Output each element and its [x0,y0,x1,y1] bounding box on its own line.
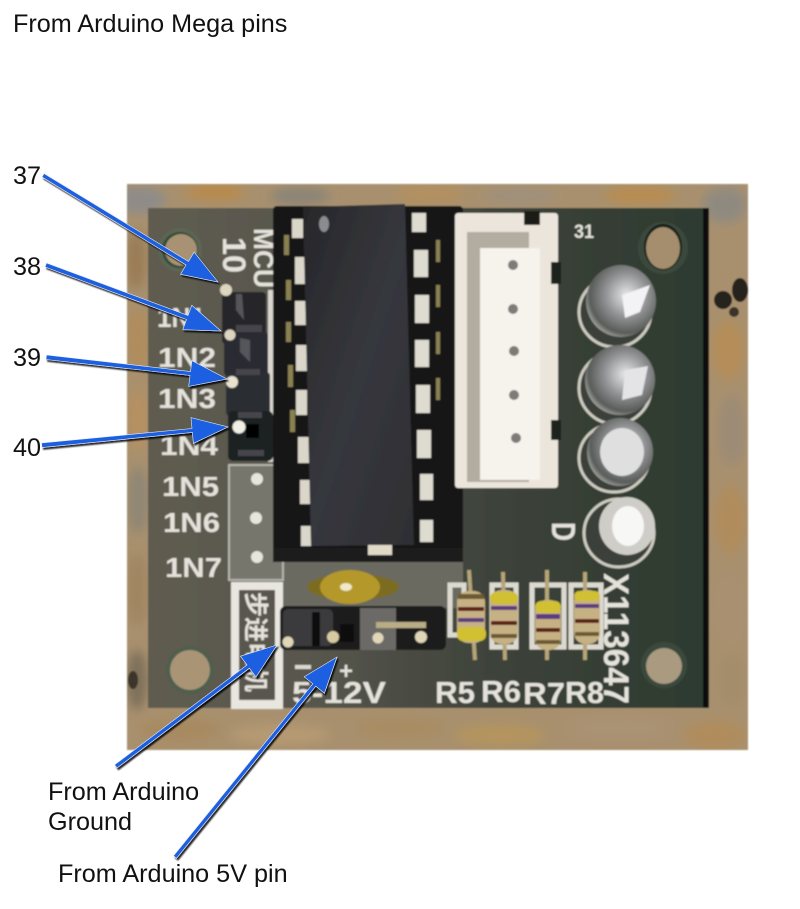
R8 [574,590,600,644]
photo background: stone surface [114,184,748,750]
arrow: pin 40 [42,418,228,448]
stepper motor silkscreen box: 步进电机 [241,592,269,692]
power labels: + [339,658,353,685]
yellow capacitor [307,570,399,604]
LED 4 [584,497,655,567]
silkscreen input labels: 1N1 [157,302,205,333]
pin label 39: 39 [13,344,41,372]
header pins [220,284,246,434]
photo: stepper driver board [114,184,748,750]
power labels [292,658,386,710]
circuit board [148,208,709,708]
arrow: pin 39 [46,355,227,386]
socket pins left [292,219,312,546]
resistors R5 to R8 [450,570,601,660]
unused pin pad strip [229,465,283,580]
title: From Arduino Mega pins [13,10,287,38]
LED 2 [579,345,655,424]
arrow: pin 38 [45,263,221,331]
solder pads [284,235,440,432]
white motor connector [455,211,561,488]
LED 1 [579,265,656,347]
silkscreen input labels [157,228,279,583]
resistor and board code labels: X113647 [596,573,635,704]
R7 [535,600,561,650]
silkscreen input labels: MCU [248,228,279,288]
pin label 37: 37 [13,162,41,190]
chip pin-one dot [319,216,329,232]
silkscreen input labels: 1N7 [165,552,222,583]
power jumper header [280,606,446,650]
IC socket [273,204,463,562]
socket pins right [412,213,433,542]
silkscreen input labels: 10 [216,237,252,273]
silkscreen input labels: 1N4 [160,430,218,461]
board marking D: D [545,522,582,541]
silkscreen input labels: 1N6 [163,507,220,538]
R5 [457,591,486,643]
LEDs [579,265,656,567]
arrow: ground [115,645,277,768]
resistor outlines [450,585,601,647]
power labels: 5-12V [292,675,386,710]
5V caption: From Arduino 5V pin [58,860,288,888]
ULN2003 chip body [303,204,414,546]
arrow: pin 37 [42,174,218,282]
ground caption: Ground [48,808,132,836]
silkscreen input labels: 1N2 [158,342,216,373]
resistor and board code labels: R8 [565,675,604,710]
stepper motor silkscreen box [231,582,283,709]
pin label 38: 38 [13,253,41,281]
arrow: 5V [174,657,337,858]
ground caption: From Arduino [48,778,199,806]
LED 3 [579,418,653,492]
leads [469,570,585,660]
resistor and board code labels [435,573,635,711]
input pin header [220,284,273,462]
board marking 31: 31 [574,222,594,243]
connector pins [508,260,521,443]
silkscreen input labels: 1N3 [158,383,216,414]
pin label 40: 40 [13,434,41,462]
resistor and board code labels: R6 [481,674,521,709]
silkscreen input labels: 1N5 [162,471,219,502]
R6 [490,590,518,644]
resistor and board code labels: R5 [435,675,475,710]
mounting holes [158,222,688,694]
resistor and board code labels: R7 [523,676,565,711]
